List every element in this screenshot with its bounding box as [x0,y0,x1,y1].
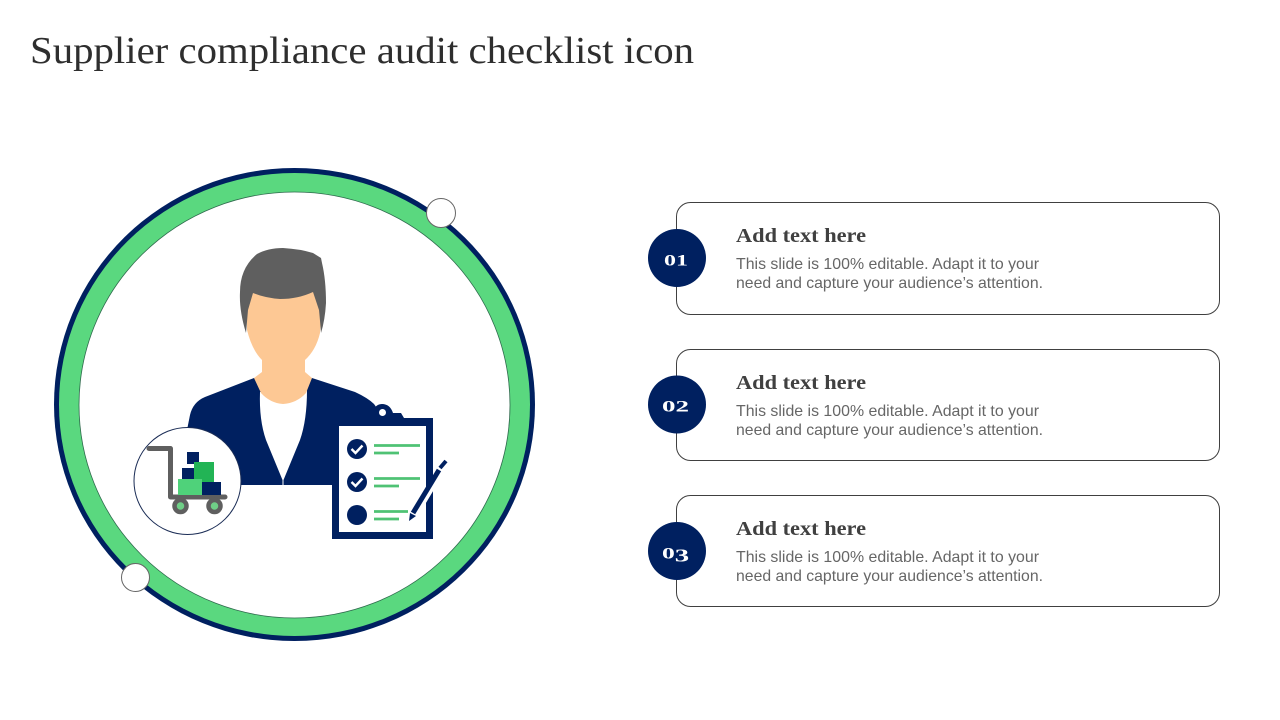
cart wheels [174,500,186,512]
number badge 01: 01 [664,252,688,270]
body text: This slide is 100% editable. Adapt it to your [736,549,1040,566]
clipboard paper [339,426,426,532]
number badge 01 [648,229,706,287]
heading: Add text here [736,372,866,394]
body text: This slide is 100% editable. Adapt it to your [736,403,1040,420]
number badge 02 [648,376,706,434]
body text [736,549,1043,585]
card outline [676,496,1220,606]
card outline [676,350,1220,460]
clipboard clip [372,404,404,418]
icon: cart badge [134,428,241,534]
badge circle [134,428,241,534]
outer ring [54,168,535,641]
title: Supplier compliance audit checklist icon [30,30,694,72]
checklist item 3 [347,505,408,525]
body text: need and capture your audience’s attention. [736,422,1043,439]
ring marker: bottom left [122,564,150,592]
number badge 02: 02 [662,398,689,416]
icon: businessperson [187,248,400,485]
number badge 03: 3 [675,547,689,566]
body text: need and capture your audience’s attention. [736,568,1043,585]
neck and face [246,280,322,404]
heading: Add text here [736,518,866,540]
panel: ring illustration [54,168,535,641]
pen [409,461,446,521]
checklist item 2 [347,472,420,492]
checklist item 1 [347,439,420,459]
body text [736,256,1043,292]
panel: item 01 [648,202,1220,314]
number badge 03: 0 [662,544,675,562]
panel: item 02 [648,350,1220,460]
jacket [187,378,400,485]
card outline [676,202,1220,314]
shirt [260,390,307,485]
number badge 03 [648,522,706,580]
panel: item 03 [648,496,1220,606]
cart frame [149,448,225,497]
hair [240,248,326,333]
cart boxes [178,452,221,495]
ring marker: top right [426,198,456,228]
body text: This slide is 100% editable. Adapt it to your [736,256,1040,273]
body text: need and capture your audience’s attention. [736,275,1043,292]
body text [736,403,1043,439]
clipboard board [332,418,433,539]
heading: Add text here [736,225,866,247]
icon: clipboard checklist [332,404,446,539]
